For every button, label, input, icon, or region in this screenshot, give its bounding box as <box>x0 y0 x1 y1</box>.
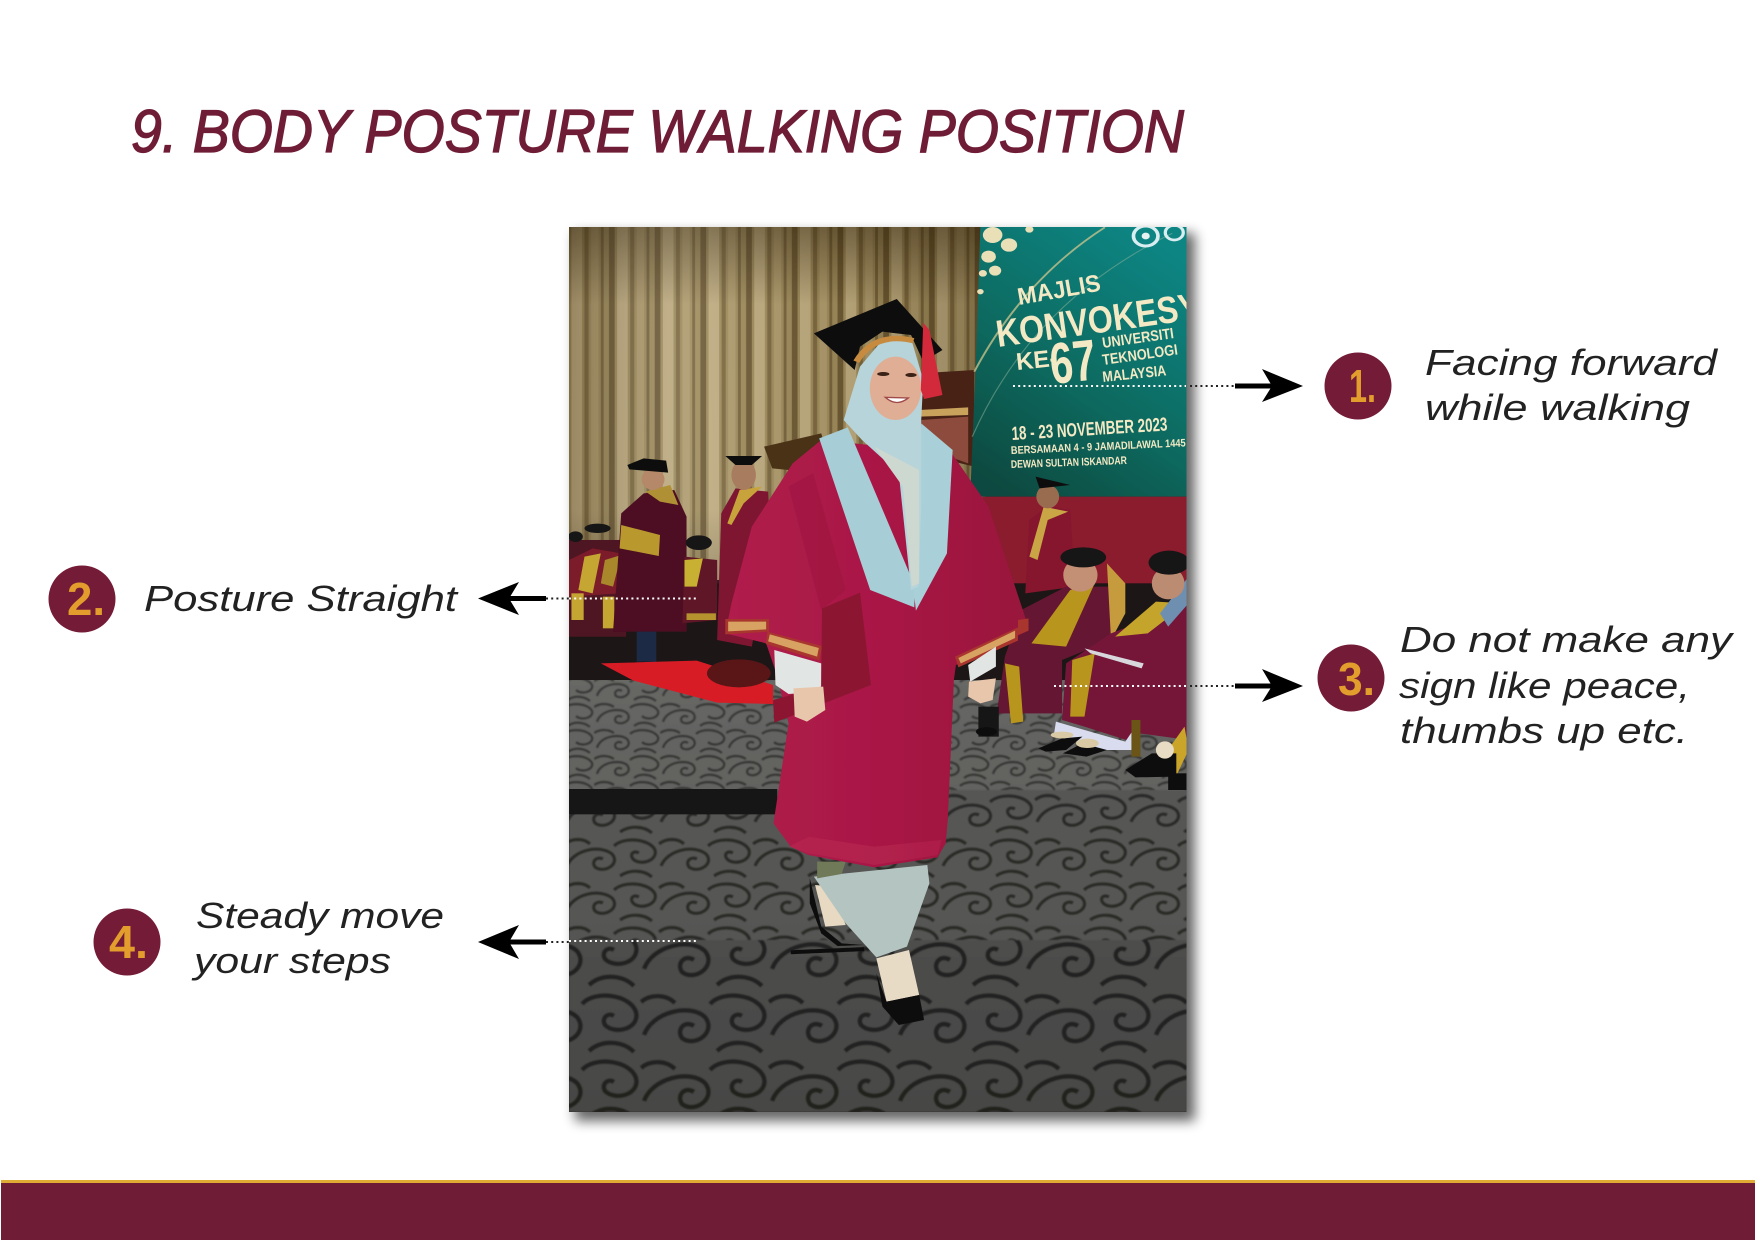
caption 3: sign like peace, <box>1399 665 1690 706</box>
photo: screen text date and venue <box>1011 417 1186 468</box>
caption 2: Posture Straight <box>144 578 459 619</box>
photo: white inner sleeves and hands <box>774 647 996 694</box>
photo: screen text date and venue: BERSAMAAN 4 - 9 JAMADILAWAL 1445 <box>1011 437 1186 457</box>
photo: standing official at right <box>1025 477 1075 593</box>
photo: red carpet platform <box>601 659 773 704</box>
photo: screen text KE-67: 67 <box>1047 327 1099 397</box>
photo: face <box>870 357 921 420</box>
photo: screen text university name: MALAYSIA <box>1102 362 1167 386</box>
photo: teal convocation screen <box>970 225 1189 497</box>
photo: graduate figure <box>725 299 1029 1025</box>
photo: maroon scroll folder <box>773 593 871 723</box>
caption 1: Facing forward <box>1425 342 1718 383</box>
photo: screen text university name: UNIVERSITI <box>1101 325 1175 352</box>
photo: mortarboard cap <box>814 299 942 399</box>
photo: screen text university name: TEKNOLOGI <box>1101 342 1179 369</box>
photo: screen text KONVOKESYEN: KONVOKESY <box>993 286 1202 356</box>
photo: crimson gown <box>725 440 1029 867</box>
arrow 3 <box>1054 669 1303 702</box>
photo: hands <box>793 678 996 722</box>
caption 3: thumbs up etc. <box>1400 710 1688 751</box>
badge 3: 3. <box>1338 653 1375 705</box>
photo: seated dignitary two <box>1054 551 1189 780</box>
caption 4: Steady move <box>196 895 444 936</box>
photo: patterned carpet floor <box>569 640 1187 1112</box>
photo: screen text KE-67 <box>1016 340 1092 384</box>
photo: screen text university name <box>1102 328 1178 382</box>
badge 1 <box>1324 352 1392 420</box>
badge 4: 4. <box>109 916 148 968</box>
caption 3 <box>1399 619 1734 751</box>
photo: gold curtain backdrop <box>569 227 985 580</box>
photo: screen text KE-67: KE- <box>1015 345 1059 376</box>
photo: seated dignitary one <box>997 547 1125 723</box>
photo: hijab <box>844 338 923 590</box>
photo: screen text date and venue: DEWAN SULTAN ISKANDAR <box>1011 455 1127 471</box>
photo: dignitaries' shoes and chair legs <box>976 707 1188 790</box>
arrow 1 <box>1013 369 1303 402</box>
caption 1 <box>1425 342 1718 428</box>
badge 1: 1. <box>1349 360 1376 412</box>
badge 2: 2. <box>67 573 105 625</box>
title: 9. BODY POSTURE WALKING POSITION <box>131 98 1185 165</box>
arrow 2 <box>478 582 699 615</box>
photo: standing officials at left <box>613 456 770 668</box>
badge 2 <box>48 566 116 632</box>
photo: gown sleeve trim <box>725 618 1029 667</box>
arrow 4 <box>478 925 699 959</box>
caption 1: while walking <box>1425 387 1690 428</box>
badge 4 <box>94 908 160 976</box>
photo: dark stage base <box>569 583 1189 680</box>
caption 4 <box>190 895 444 981</box>
photo: seated dignitaries at left <box>568 524 626 637</box>
photo: red stage wall <box>982 496 1186 584</box>
footer bar <box>1 1180 1755 1240</box>
photo: wooden podium behind graduate <box>764 370 974 470</box>
photo: black floor strip <box>569 789 777 814</box>
photo: screen text MAJLIS: MAJLIS <box>1015 270 1103 311</box>
photo: pale skirt <box>814 865 929 957</box>
caption 3: Do not make any <box>1400 619 1734 660</box>
photo: graduate walking at convocation <box>568 225 1202 1121</box>
photo: shoes and stockings <box>791 878 924 1025</box>
photo: screen text date and venue: 18 - 23 NOVEMBER 2023 <box>1011 415 1168 445</box>
badge 3 <box>1318 644 1384 712</box>
caption 4: your steps <box>190 940 391 981</box>
photo: pale blue stole <box>819 423 953 611</box>
